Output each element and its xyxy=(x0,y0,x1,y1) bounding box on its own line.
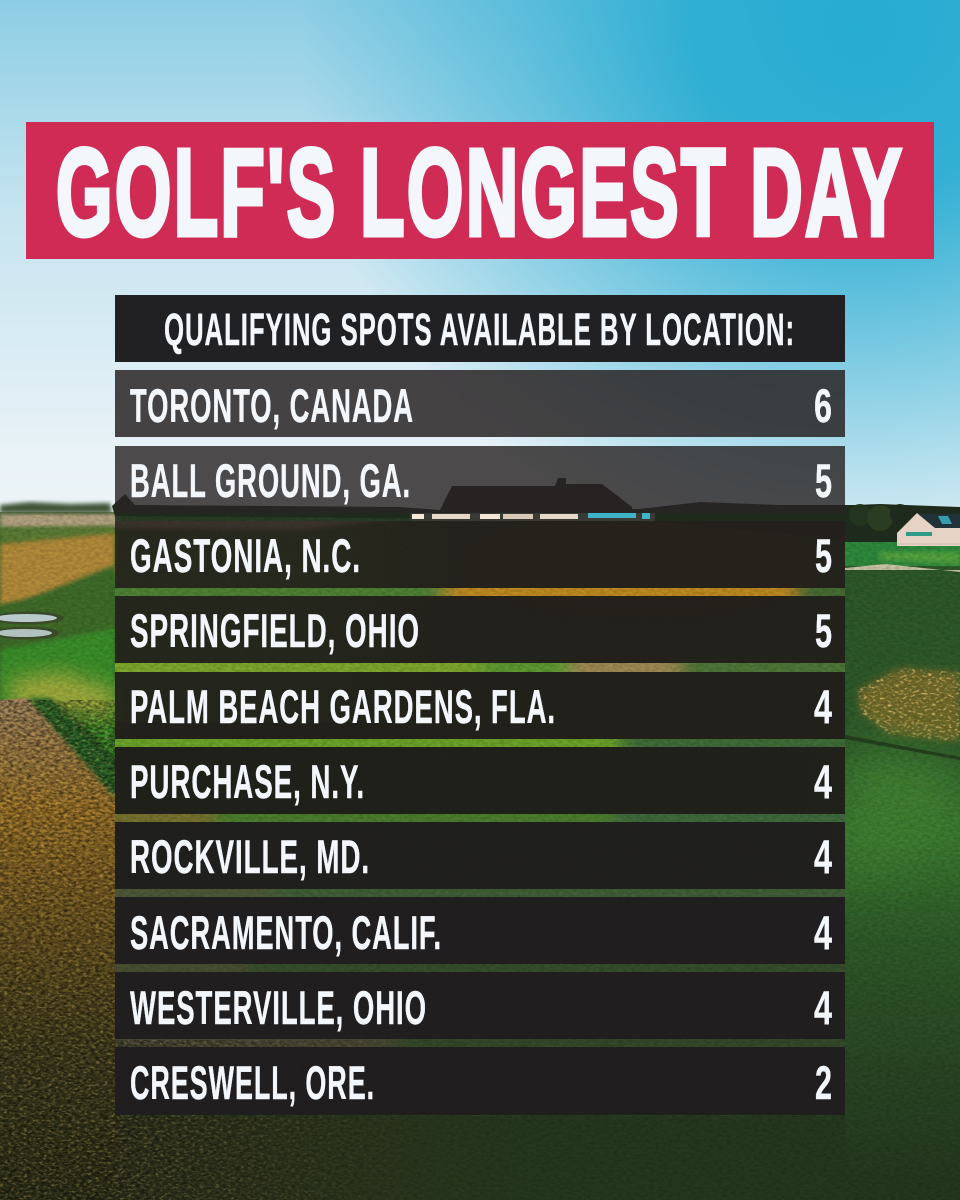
row: Rockville, Md. xyxy=(115,822,845,889)
row: Creswell, Ore.: CRESWELL, ORE. xyxy=(130,1057,375,1110)
row: Springfield, Ohio: 5 xyxy=(815,605,832,658)
golf course land xyxy=(0,512,960,1200)
row: Palm Beach Gardens, Fla.: PALM BEACH GARDENS, FLA. xyxy=(130,681,556,734)
row: Toronto, Canada: 6 xyxy=(814,380,832,433)
row: Purchase, N.Y. xyxy=(115,747,845,814)
row: Sacramento, Calif. xyxy=(115,897,845,964)
row: Purchase, N.Y.: PURCHASE, N.Y. xyxy=(130,756,365,809)
row: Ball Ground, Ga.: 5 xyxy=(815,455,832,508)
texture over the rough xyxy=(0,512,960,1200)
row: Sacramento, Calif.: 4 xyxy=(814,907,832,960)
row: Springfield, Ohio xyxy=(115,596,845,663)
row: Palm Beach Gardens, Fla.: 4 xyxy=(814,681,832,734)
row: Toronto, Canada xyxy=(115,370,845,437)
clubhouse xyxy=(410,478,655,521)
row: Gastonia, N.C. xyxy=(115,521,845,588)
row: Westerville, Ohio xyxy=(115,972,845,1039)
row: Creswell, Ore. xyxy=(115,1047,845,1115)
distant tree line xyxy=(0,494,960,542)
bunkers xyxy=(0,612,64,640)
row: Purchase, N.Y.: 4 xyxy=(814,756,832,809)
row: Ball Ground, Ga. xyxy=(115,446,845,513)
row: Creswell, Ore.: 2 xyxy=(815,1057,832,1110)
row: Rockville, Md.: ROCKVILLE, MD. xyxy=(130,831,370,884)
row: Rockville, Md.: 4 xyxy=(814,831,832,884)
row: Westerville, Ohio: WESTERVILLE, OHIO xyxy=(130,982,427,1035)
row: Springfield, Ohio: SPRINGFIELD, OHIO xyxy=(130,605,420,658)
row: Gastonia, N.C.: 5 xyxy=(815,530,832,583)
table header xyxy=(115,295,845,362)
row: Gastonia, N.C.: GASTONIA, N.C. xyxy=(130,530,361,583)
row: Sacramento, Calif.: SACRAMENTO, CALIF. xyxy=(130,907,442,960)
row: Ball Ground, Ga.: BALL GROUND, GA. xyxy=(130,455,411,508)
row: Toronto, Canada: TORONTO, CANADA xyxy=(130,380,414,433)
small clubhouse on the right xyxy=(897,513,960,546)
sky xyxy=(0,0,960,530)
strips of course visible between rows xyxy=(100,513,860,1047)
title banner xyxy=(26,122,934,262)
row: Westerville, Ohio: 4 xyxy=(814,982,832,1035)
